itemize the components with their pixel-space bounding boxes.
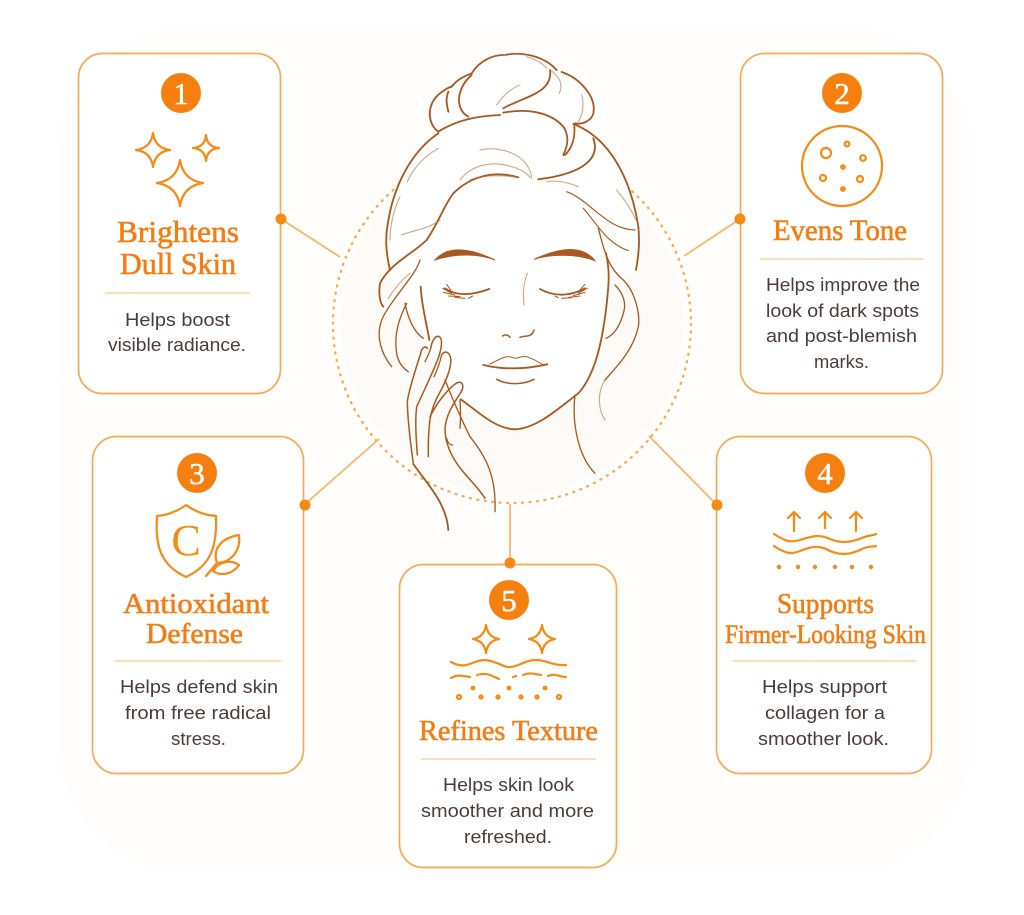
icon: lifting arrows and waves xyxy=(774,512,876,554)
heading: Defense xyxy=(146,619,243,650)
description: Helps skin look xyxy=(443,774,575,795)
description: from free radical xyxy=(125,702,271,723)
description: smoother and more xyxy=(421,800,594,821)
icon: dot row xyxy=(777,565,873,569)
badge 2 xyxy=(822,73,862,113)
panel: firmer-looking skin xyxy=(716,436,932,774)
icon: skin spots xyxy=(802,126,882,206)
description: Helps defend skin xyxy=(120,676,278,697)
description: Helps boost xyxy=(125,309,230,330)
description: Helps support xyxy=(762,676,887,697)
description: refreshed. xyxy=(464,826,552,847)
description: smoother look. xyxy=(758,728,889,749)
description xyxy=(758,676,889,749)
badge 4: 4 xyxy=(817,456,833,491)
heading: Antioxidant xyxy=(123,589,269,620)
heading xyxy=(117,214,239,281)
panel: brightens dull skin xyxy=(78,54,280,394)
badge 3: 3 xyxy=(189,456,205,491)
heading: Dull Skin xyxy=(120,246,236,281)
description xyxy=(421,774,594,847)
icon letter C: C xyxy=(171,516,201,565)
description: stress. xyxy=(171,728,226,749)
heading: Refines Texture xyxy=(419,715,598,747)
description: marks. xyxy=(814,351,869,372)
description: collagen for a xyxy=(765,702,886,723)
badge 4 xyxy=(805,453,845,493)
description xyxy=(766,274,920,372)
heading: Firmer-Looking Skin xyxy=(725,620,926,649)
panel: antioxidant defense xyxy=(92,436,304,774)
connector dots xyxy=(276,214,746,568)
dotted circle behind face xyxy=(333,145,691,503)
badge 2: 2 xyxy=(834,76,850,111)
panel: evens tone xyxy=(740,54,942,394)
description xyxy=(108,309,246,355)
hand xyxy=(407,336,495,530)
description: Helps improve the xyxy=(766,274,920,295)
description xyxy=(120,676,278,749)
badge 1: 1 xyxy=(173,76,189,111)
connector lines xyxy=(281,219,740,563)
heading: Supports xyxy=(777,589,874,620)
panel: refines texture xyxy=(400,564,616,868)
icon: sparkles xyxy=(136,133,219,206)
badge 5: 5 xyxy=(501,583,517,618)
icon: sparkles over skin texture xyxy=(451,625,566,699)
description: visible radiance. xyxy=(108,334,246,355)
description: look of dark spots xyxy=(766,300,919,321)
heading: Evens Tone xyxy=(773,214,907,247)
badge 3 xyxy=(177,453,217,493)
badge 1 xyxy=(161,73,201,113)
heading: Brightens xyxy=(117,214,239,249)
description: and post-blemish xyxy=(766,325,917,346)
badge 5 xyxy=(489,580,529,620)
heading xyxy=(725,589,926,649)
icon: shield with leaf xyxy=(157,505,239,577)
icon: texture dots xyxy=(471,686,547,690)
face illustration xyxy=(379,54,639,530)
heading xyxy=(123,589,269,650)
